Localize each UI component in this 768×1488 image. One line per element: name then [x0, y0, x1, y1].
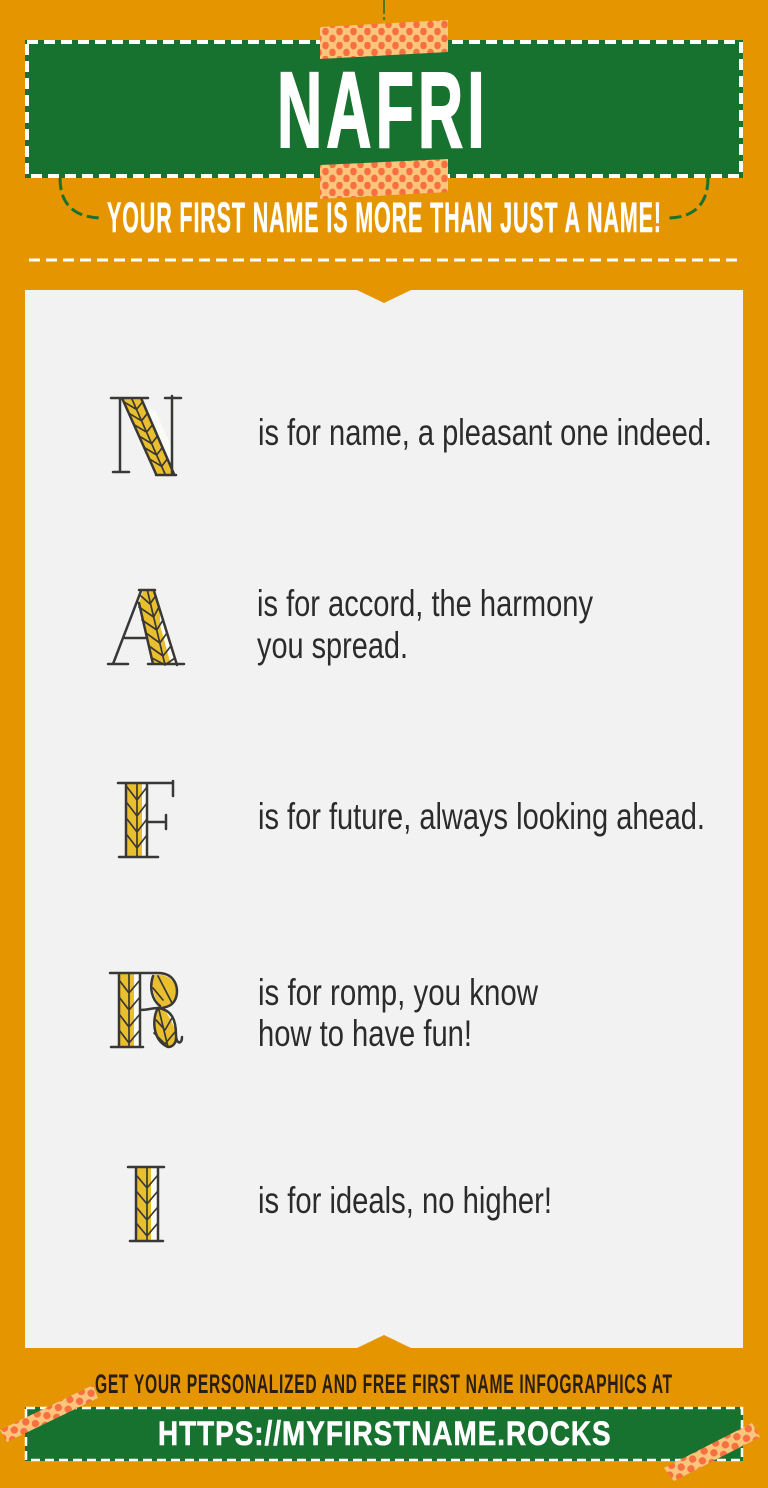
icon: letter N — [111, 396, 181, 475]
tape: footer right — [664, 1423, 760, 1481]
text: R line block: how to have fun! — [258, 1013, 472, 1054]
icon: letter A — [108, 590, 184, 665]
icon: letter F — [118, 781, 173, 857]
subtitle: YOUR FIRST NAME IS MORE THAN JUST A NAME! — [107, 194, 661, 242]
tape: footer left — [0, 1385, 98, 1442]
subtitle connector: right — [667, 178, 708, 218]
title: NAFRI — [277, 49, 485, 170]
dashed divider — [29, 258, 739, 262]
text: A line block: is for accord, the harmony — [257, 583, 593, 624]
subtitle connector: left — [60, 178, 103, 218]
icon: letter R — [110, 973, 182, 1047]
text: R line block: is for romp, you know — [258, 972, 538, 1013]
title banner — [25, 40, 743, 178]
content panel — [25, 290, 743, 1348]
footer call to action: GET YOUR PERSONALIZED AND FREE FIRST NAME INFOGRAPHICS AT — [95, 1369, 672, 1399]
text: R line block — [258, 972, 538, 1054]
tape: top — [320, 20, 448, 59]
icon: letter I — [128, 1167, 164, 1241]
text: A line block — [257, 583, 593, 666]
text: I: is for ideals, no higher! — [258, 1180, 552, 1221]
text: A line block: you spread. — [257, 625, 408, 666]
footer banner — [25, 1407, 743, 1461]
footer URL: HTTPS://MYFIRSTNAME.ROCKS — [158, 1414, 611, 1453]
tape: bottom — [320, 159, 448, 199]
top hanging line — [383, 0, 385, 20]
